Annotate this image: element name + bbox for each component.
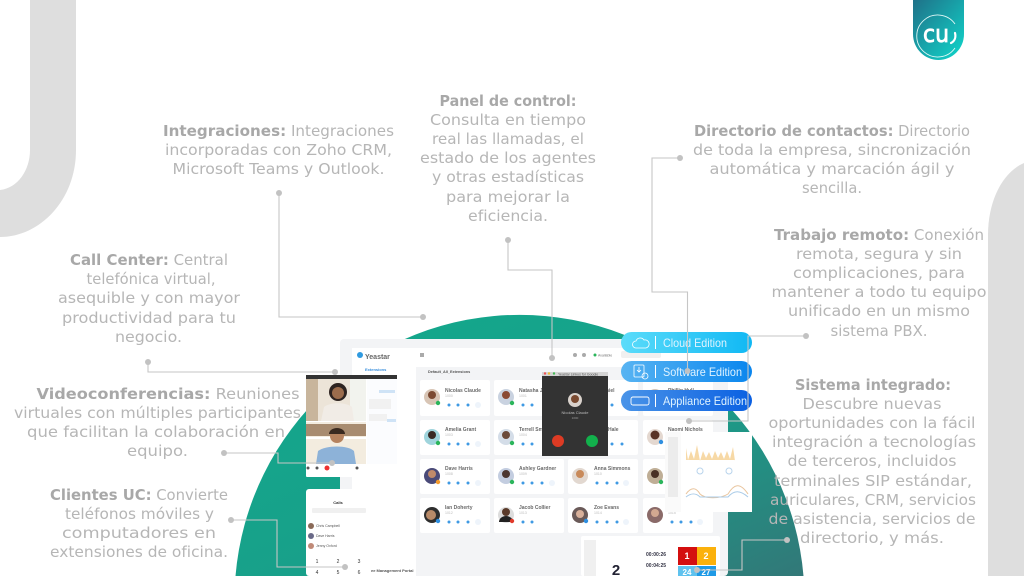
text: sistema integrado: Descubre nuevas	[802, 395, 942, 413]
card: Anna Simmons: 1010	[594, 472, 602, 476]
queue panel	[581, 536, 720, 576]
call popup: Nicolas Claude	[562, 410, 589, 415]
card: Natasha: Natasha Jones	[519, 388, 555, 394]
connector: integraciones	[276, 190, 426, 320]
card: Phillip Hull: Phillip Hull	[668, 388, 694, 394]
phone app: 2	[337, 559, 340, 565]
card: Dave Harris	[420, 459, 490, 494]
card: Daniel: Nathaniel	[592, 388, 615, 394]
card: Hale	[568, 420, 638, 455]
text: call center: negocio.	[115, 328, 182, 346]
text: sistema integrado: directorio, y más.	[800, 529, 944, 547]
edition pill: cloud: Cloud Edition	[663, 336, 727, 350]
text: trabajo remoto	[772, 226, 986, 340]
icon: cloud	[632, 338, 649, 348]
stat: yellow	[697, 547, 716, 565]
connector: clientes UC	[228, 517, 348, 570]
card: Zoe Evans: 1014	[594, 511, 602, 515]
card: Nicolas Claude: 1000	[445, 394, 453, 398]
card: Naomi Nichols: Naomi Nichols	[668, 427, 703, 433]
text: integraciones: incorporadas con Zoho CRM,	[165, 141, 392, 159]
green circle background	[236, 315, 804, 576]
analytics panel	[665, 432, 752, 512]
text: directorio de contactos: automática y marcación ágil y	[710, 160, 955, 178]
sidebar: Yeastar	[365, 354, 390, 361]
connector: sistema integrado	[694, 537, 790, 573]
card: Natasha	[494, 380, 564, 416]
text: directorio de contactos: de toda la empresa, sincronización	[693, 141, 971, 159]
card: Dave Harris: 1008	[445, 472, 453, 476]
card: Ian Doherty: Ian Doherty	[445, 505, 473, 511]
card: Anna Simmons	[568, 459, 638, 494]
phone app: Calls	[333, 500, 344, 505]
phone app: 6	[358, 570, 361, 576]
queue panel: 1	[684, 551, 690, 561]
text: directorio de contactos: sencilla.	[802, 179, 862, 197]
call popup: 1000	[572, 416, 579, 420]
text: videoconferencias: virtuales con múltiples participantes	[14, 404, 301, 422]
text: trabajo remoto: complicaciones, para	[793, 264, 965, 282]
text: integraciones: Microsoft Teams y Outlook.	[172, 160, 384, 178]
text: panel de control: eficiencia.	[468, 207, 548, 225]
edition pill: appliance	[621, 390, 752, 411]
card: Naomi Nichols: 1007	[668, 433, 676, 437]
text: panel de control: Panel de control:	[440, 92, 576, 110]
text: integraciones	[163, 122, 394, 178]
stat: light blue	[678, 566, 697, 576]
decorative band: top left	[0, 0, 76, 237]
text: videoconferencias: que facilitan la colaboración en	[27, 423, 285, 441]
chat pane	[367, 379, 397, 464]
text: integraciones: Integraciones: Integraciones	[163, 122, 394, 140]
text: panel de control: y otras estadísticas	[432, 168, 584, 186]
card: Amelia Grant: Amelia Grant	[445, 427, 476, 433]
text: panel de control: real las llamadas, el	[432, 130, 584, 148]
card: Ashley Gardner: Ashley Gardner	[519, 466, 556, 472]
text: sistema integrado: integración a tecnologías	[772, 433, 976, 451]
card: Zoe Evans	[568, 498, 638, 533]
text: clientes UC: computadores en	[62, 524, 216, 542]
header bar	[416, 348, 728, 367]
icon: appliance	[631, 397, 649, 405]
call popup: Yeastar Linkus for Google	[558, 372, 598, 376]
card: Ashley Gardner: 1009	[519, 472, 527, 476]
decorative band: right	[988, 163, 1024, 576]
phone app: 3	[358, 559, 361, 565]
card: Jacob Collier	[494, 498, 564, 533]
edition pill: cloud	[621, 332, 752, 353]
card: Hale: Hale	[608, 427, 619, 433]
queue panel: 2	[703, 551, 709, 561]
stat: red	[678, 547, 697, 565]
queue panel: 00:00:26	[646, 552, 666, 558]
logo	[913, 0, 964, 60]
text: panel de control	[420, 92, 596, 225]
icon: download	[634, 365, 648, 379]
card: Amelia Grant: 1003	[445, 433, 453, 437]
connector: call center	[145, 359, 338, 375]
text: sistema integrado	[768, 376, 976, 547]
text: call center: productividad para tu	[62, 309, 236, 327]
text: clientes UC: Clientes UC: Convierte	[50, 486, 228, 504]
icon: hang up	[552, 435, 564, 447]
sidebar: Extensions	[365, 367, 387, 372]
connector: videoconferencias	[221, 450, 335, 466]
header bar: Available	[598, 354, 612, 358]
sidebar: ee Management Portal	[371, 568, 413, 573]
photo: woman	[306, 379, 366, 421]
connector: panel de control	[505, 237, 555, 361]
dashboard panel	[340, 339, 728, 576]
text: clientes UC: teléfonos móviles y	[65, 505, 214, 523]
connector: directorio	[652, 155, 690, 374]
text: videoconferencias	[14, 385, 301, 460]
text: call center: telefónica virtual,	[86, 270, 216, 288]
text: trabajo remoto: sistema PBX.	[830, 322, 928, 340]
card: row 3 col 4	[643, 459, 713, 494]
stat: blue	[697, 566, 716, 576]
photo: man	[306, 422, 366, 464]
text: directorio de contactos: Directorio de contactos: Directorio	[694, 122, 970, 140]
text: panel de control: Consulta en tiempo	[430, 111, 586, 129]
card: Nicolas Claude	[420, 380, 490, 416]
card: Ian Doherty	[420, 498, 490, 533]
sidebar	[352, 348, 416, 576]
card: Ashley Gardner	[494, 459, 564, 494]
text: sistema integrado: de terceros, incluidos	[788, 452, 957, 470]
phone app: Dave Harris	[316, 534, 335, 538]
phone app: 1	[316, 559, 319, 565]
edition pill: software	[621, 361, 752, 382]
phone app: 5	[337, 570, 340, 576]
text: trabajo remoto: unificado en un mismo	[788, 302, 970, 320]
text: panel de control: estado de los agentes	[420, 149, 596, 167]
text: videoconferencias: equipo.	[127, 442, 188, 460]
card: Jacob Collier: Jacob Collier	[519, 505, 550, 511]
edition pill: software: Software Edition	[663, 365, 742, 379]
text: sistema integrado: auriculares, CRM, servicios	[770, 491, 976, 509]
text: sistema integrado: de asistencia, servicios de	[768, 510, 976, 528]
call popup	[542, 372, 608, 456]
text: sistema integrado: oportunidades con la fácil	[768, 414, 976, 432]
card: Naomi Nichols	[643, 420, 713, 455]
card: Terrell: Terrell Smith	[519, 427, 549, 433]
card: Terrell: 1004	[519, 433, 527, 437]
text: sistema integrado: Sistema integrado:	[795, 376, 951, 394]
card: Phillip Hull	[643, 380, 713, 416]
text: trabajo remoto: remota, segura y sin	[796, 245, 962, 263]
text: call center: asequible y con mayor	[58, 289, 241, 307]
phone app: Chris Campbell	[316, 524, 340, 528]
card: Natasha: 1001	[519, 394, 527, 398]
card: Anna Simmons: Anna Simmons	[594, 466, 631, 472]
phone app	[306, 489, 369, 576]
connector: trabajo remoto	[686, 333, 809, 424]
contact cards	[420, 380, 713, 533]
logo: cu	[923, 20, 949, 48]
card: row 4 col 4: 1015	[668, 511, 676, 515]
card: Terrell	[494, 420, 564, 455]
phone app: 4	[316, 570, 319, 576]
dashboard panel: Default_All_Extensions	[428, 370, 470, 374]
card: Daniel	[568, 380, 638, 416]
text: clientes UC	[50, 486, 228, 561]
edition pill: appliance: Appliance Edition	[663, 394, 747, 408]
text: sistema integrado: terminales SIP estándar,	[774, 472, 972, 490]
text: trabajo remoto: mantener a todo tu equipo	[772, 283, 986, 301]
card: Jacob Collier: 1013	[519, 511, 527, 515]
text: directorio de contactos	[693, 122, 971, 197]
text: clientes UC: extensiones de oficina.	[50, 543, 228, 561]
card: Dave Harris: Dave Harris	[445, 466, 473, 472]
card: Ian Doherty: 1012	[445, 511, 453, 515]
call controls	[324, 466, 330, 470]
text: panel de control: para mejorar la	[446, 188, 570, 206]
icon: answer	[586, 435, 598, 447]
phone app: Jenny Oxford	[316, 544, 337, 548]
card: Nicolas Claude: Nicolas Claude	[445, 388, 481, 394]
text: trabajo remoto: Trabajo remoto: Conexión	[774, 226, 984, 244]
queue panel: 00:04:25	[646, 563, 666, 569]
video call window	[306, 375, 399, 477]
text: call center: Call Center: Central	[70, 251, 228, 269]
card: Amelia Grant	[420, 420, 490, 455]
text: videoconferencias: Videoconferencias: Reuniones	[36, 385, 300, 403]
card: Zoe Evans: Zoe Evans	[594, 505, 619, 511]
text: call center	[58, 251, 241, 346]
card: row 4 col 4	[643, 498, 713, 533]
